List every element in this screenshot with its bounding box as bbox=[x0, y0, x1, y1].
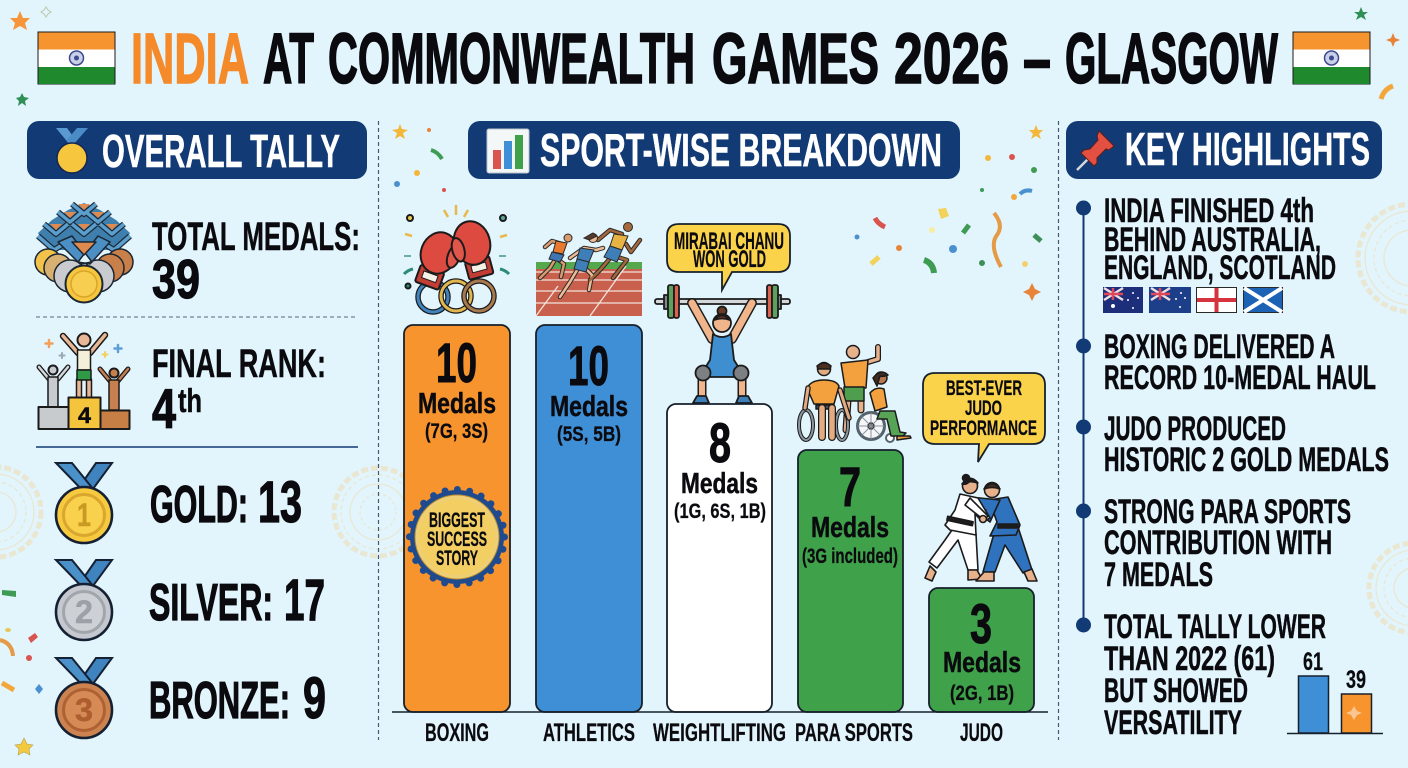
bar: boxing bbox=[404, 205, 510, 712]
icon: Australia flag bbox=[1103, 287, 1143, 313]
highlight 5: VERSATILITY bbox=[1104, 704, 1242, 742]
title text: INDIA bbox=[131, 20, 249, 99]
icon: weightlifter bbox=[655, 285, 790, 403]
icon: boxing gloves and rings bbox=[404, 205, 509, 312]
bar: weightlifting: 8 bbox=[709, 411, 731, 474]
badge: biggest success story bbox=[410, 490, 504, 584]
gold row: 13 bbox=[258, 470, 302, 535]
axis labels: PARA SPORTS bbox=[795, 719, 913, 747]
total medals bbox=[35, 203, 360, 310]
gold row: GOLD: bbox=[150, 476, 248, 534]
badge: biggest success story: BIGGEST bbox=[429, 509, 485, 532]
bar: judo bbox=[923, 373, 1045, 712]
axis labels: WEIGHTLIFTING bbox=[653, 719, 786, 747]
gold row bbox=[56, 463, 302, 543]
badge: biggest success story: SUCCESS bbox=[427, 528, 487, 551]
heading: sport-wise breakdown bbox=[468, 121, 960, 179]
bar: para sports: Medals bbox=[811, 512, 889, 544]
callout: best-ever judo performance bbox=[923, 373, 1045, 462]
bar: judo: (2G, 1B) bbox=[950, 682, 1014, 705]
highlight 5: THAN 2022 (61) bbox=[1104, 640, 1275, 678]
bar: boxing: (7G, 3S) bbox=[425, 420, 488, 443]
callout: best-ever judo performance: JUDO bbox=[965, 397, 1002, 420]
heading: overall tally: OVERALL TALLY bbox=[102, 125, 340, 177]
title text: GAMES bbox=[712, 20, 879, 99]
icon: New Zealand flag bbox=[1149, 287, 1191, 313]
final rank: th bbox=[178, 382, 202, 419]
icon: judo athletes bbox=[925, 474, 1037, 581]
mini bar chart: 2022 vs 2026: 39 bbox=[1346, 666, 1366, 694]
highlight 4: 7 MEDALS bbox=[1104, 556, 1213, 594]
panel: sport-wise breakdown bbox=[392, 121, 1048, 747]
bar: judo: 3 bbox=[970, 592, 992, 655]
title text bbox=[131, 20, 1278, 99]
heading: overall tally bbox=[27, 121, 367, 179]
panel: overall tally bbox=[27, 121, 367, 738]
highlight 3 bbox=[1076, 410, 1389, 479]
icon: podium: 4 bbox=[78, 403, 92, 428]
icon: gold medal 1 bbox=[56, 463, 112, 543]
bar: weightlifting: (1G, 6S, 1B) bbox=[674, 500, 766, 523]
heading: key highlights bbox=[1066, 121, 1382, 179]
bar: boxing: 10 bbox=[436, 331, 477, 394]
panel: key highlights bbox=[1066, 121, 1389, 742]
bar: weightlifting bbox=[655, 224, 790, 712]
bar: para sports: (3G included) bbox=[802, 545, 898, 568]
final rank: 4 bbox=[152, 377, 176, 440]
decorative mandalas bbox=[0, 204, 1408, 633]
icon: bronze medal 3: 3 bbox=[75, 692, 93, 728]
title text: 2026 bbox=[894, 20, 1009, 99]
bronze row: BRONZE: bbox=[149, 672, 290, 730]
bar rectangle bbox=[404, 325, 510, 712]
bar: judo: Medals bbox=[943, 647, 1021, 679]
silver row bbox=[56, 560, 325, 640]
bar: athletics bbox=[536, 222, 642, 712]
icon: Scotland flag bbox=[1244, 288, 1282, 312]
axis labels: JUDO bbox=[960, 719, 1003, 747]
total medals: TOTAL MEDALS: bbox=[152, 215, 360, 259]
highlight 4 bbox=[1076, 493, 1351, 594]
final rank bbox=[38, 334, 326, 440]
bar: boxing: Medals bbox=[418, 388, 496, 420]
title text: COMMONWEALTH bbox=[328, 20, 695, 99]
highlight 2 bbox=[1076, 328, 1376, 397]
bar: athletics: (5S, 5B) bbox=[557, 423, 621, 446]
heading: sport-wise breakdown: SPORT-WISE BREAKDOWN bbox=[540, 124, 942, 176]
title bbox=[38, 20, 1370, 99]
icon: silver medal 2 bbox=[56, 560, 112, 640]
icon: India flag left bbox=[38, 32, 115, 84]
icon: podium bbox=[38, 334, 130, 429]
icon: red pushpin bbox=[1077, 131, 1114, 170]
bronze row bbox=[56, 658, 326, 738]
icon: mini bar chart bbox=[487, 129, 529, 173]
silver row: SILVER: bbox=[149, 574, 273, 632]
bar rectangle bbox=[929, 588, 1034, 712]
icon: bronze medal 3 bbox=[56, 658, 112, 738]
column dividers bbox=[378, 121, 1058, 740]
highlight 1 bbox=[1076, 192, 1336, 313]
bar rectangle bbox=[798, 450, 903, 712]
icon: gold medal bbox=[56, 128, 88, 173]
bar rectangle bbox=[536, 325, 642, 712]
axis labels bbox=[425, 719, 1003, 747]
callout: Mirabai Chanu: MIRABAI CHANU bbox=[674, 228, 784, 255]
total medals: 39 bbox=[152, 248, 200, 310]
axis labels: ATHLETICS bbox=[543, 719, 635, 747]
bar: para sports: 7 bbox=[839, 455, 861, 518]
icon: India flag right bbox=[1293, 32, 1370, 84]
bar: weightlifting: Medals bbox=[681, 468, 758, 500]
bar rectangle bbox=[667, 404, 772, 712]
highlight 5 bbox=[1076, 608, 1326, 742]
bar: athletics: 10 bbox=[568, 334, 609, 397]
icon: England flag bbox=[1196, 288, 1236, 312]
bronze row: 9 bbox=[303, 666, 326, 731]
highlight 5: BUT SHOWED bbox=[1104, 672, 1248, 710]
callout: best-ever judo performance: BEST-EVER bbox=[946, 377, 1022, 400]
badge: biggest success story: STORY bbox=[436, 547, 478, 570]
icon: silver medal 2: 2 bbox=[75, 594, 93, 630]
mini bar chart: 2022 vs 2026 bbox=[1287, 648, 1383, 734]
highlight 3: JUDO PRODUCED bbox=[1104, 410, 1286, 448]
icon: medal pile bbox=[35, 203, 133, 302]
silver row: 17 bbox=[284, 568, 325, 633]
title text: – bbox=[1023, 20, 1051, 99]
final rank: FINAL RANK: bbox=[152, 342, 326, 386]
callout: Mirabai Chanu bbox=[667, 224, 790, 290]
bar: athletics: Medals bbox=[550, 391, 628, 423]
callout: best-ever judo performance: PERFORMANCE bbox=[930, 417, 1037, 440]
icon: runners on track bbox=[536, 222, 642, 316]
title text: AT bbox=[263, 20, 314, 99]
callout: Mirabai Chanu: WON GOLD bbox=[693, 246, 766, 273]
bar: para sports bbox=[798, 346, 911, 712]
axis labels: BOXING bbox=[425, 719, 489, 747]
icon: para athletes bbox=[799, 346, 911, 442]
icon: gold medal 1: 1 bbox=[77, 497, 91, 533]
mini bar chart: 2022 vs 2026: 61 bbox=[1303, 648, 1323, 676]
timeline line bbox=[1082, 208, 1084, 625]
